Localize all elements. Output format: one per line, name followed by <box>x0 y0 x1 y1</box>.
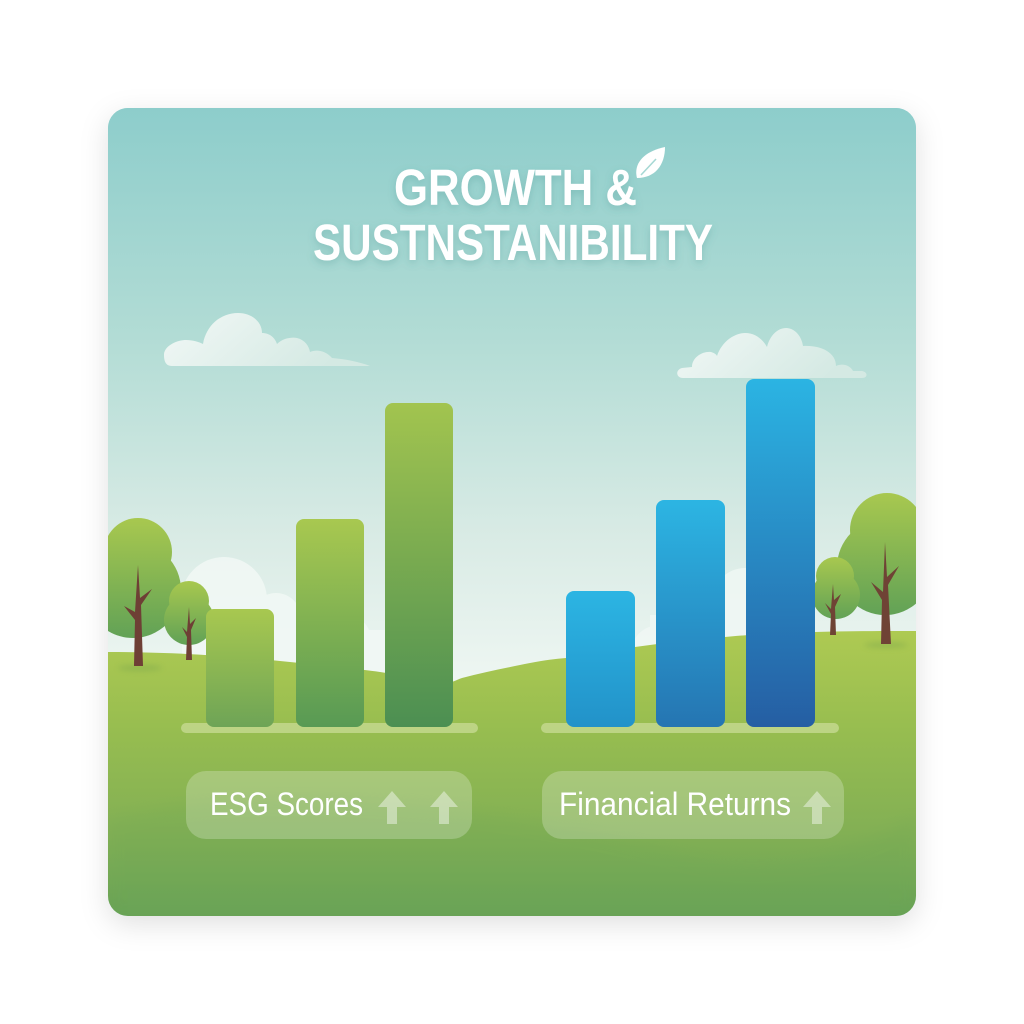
bar: ESG high <box>385 403 453 727</box>
panel: landscape card <box>85 108 933 916</box>
tree: small left <box>164 581 214 660</box>
label: financial returns <box>542 771 844 839</box>
icon: up arrow 2 <box>430 791 458 824</box>
icon: up arrow <box>803 791 831 824</box>
tree: large right <box>838 493 916 648</box>
cloud: behind right bars <box>650 568 746 624</box>
tree: small right <box>812 557 860 635</box>
bar chart: financial returns <box>541 379 839 733</box>
sky background <box>108 108 916 916</box>
bar: financial low <box>566 591 635 727</box>
title: SUSTNSTANIBILITY <box>313 214 713 271</box>
icon: up arrow 1 <box>378 791 406 824</box>
label: ESG scores: ESG Scores <box>210 786 363 822</box>
label: financial returns: Financial Returns <box>559 786 791 822</box>
tree: large left <box>108 518 180 672</box>
lower hill shading <box>108 799 916 916</box>
ground hills <box>108 631 916 916</box>
title <box>313 159 713 271</box>
baseline: ESG chart <box>181 723 478 733</box>
title: GROWTH & <box>394 159 637 216</box>
icon: leaf <box>636 147 665 178</box>
cloud: upper right <box>677 328 866 378</box>
cloud: behind left bars <box>186 557 385 638</box>
label: ESG scores <box>186 771 472 839</box>
bar: ESG medium <box>296 519 364 727</box>
bar: ESG low <box>206 609 274 727</box>
baseline: financial chart <box>541 723 839 733</box>
bar: financial high <box>746 379 815 727</box>
cloud: upper left <box>164 313 370 366</box>
bar: financial medium <box>656 500 725 727</box>
bar chart: ESG scores <box>181 403 478 733</box>
